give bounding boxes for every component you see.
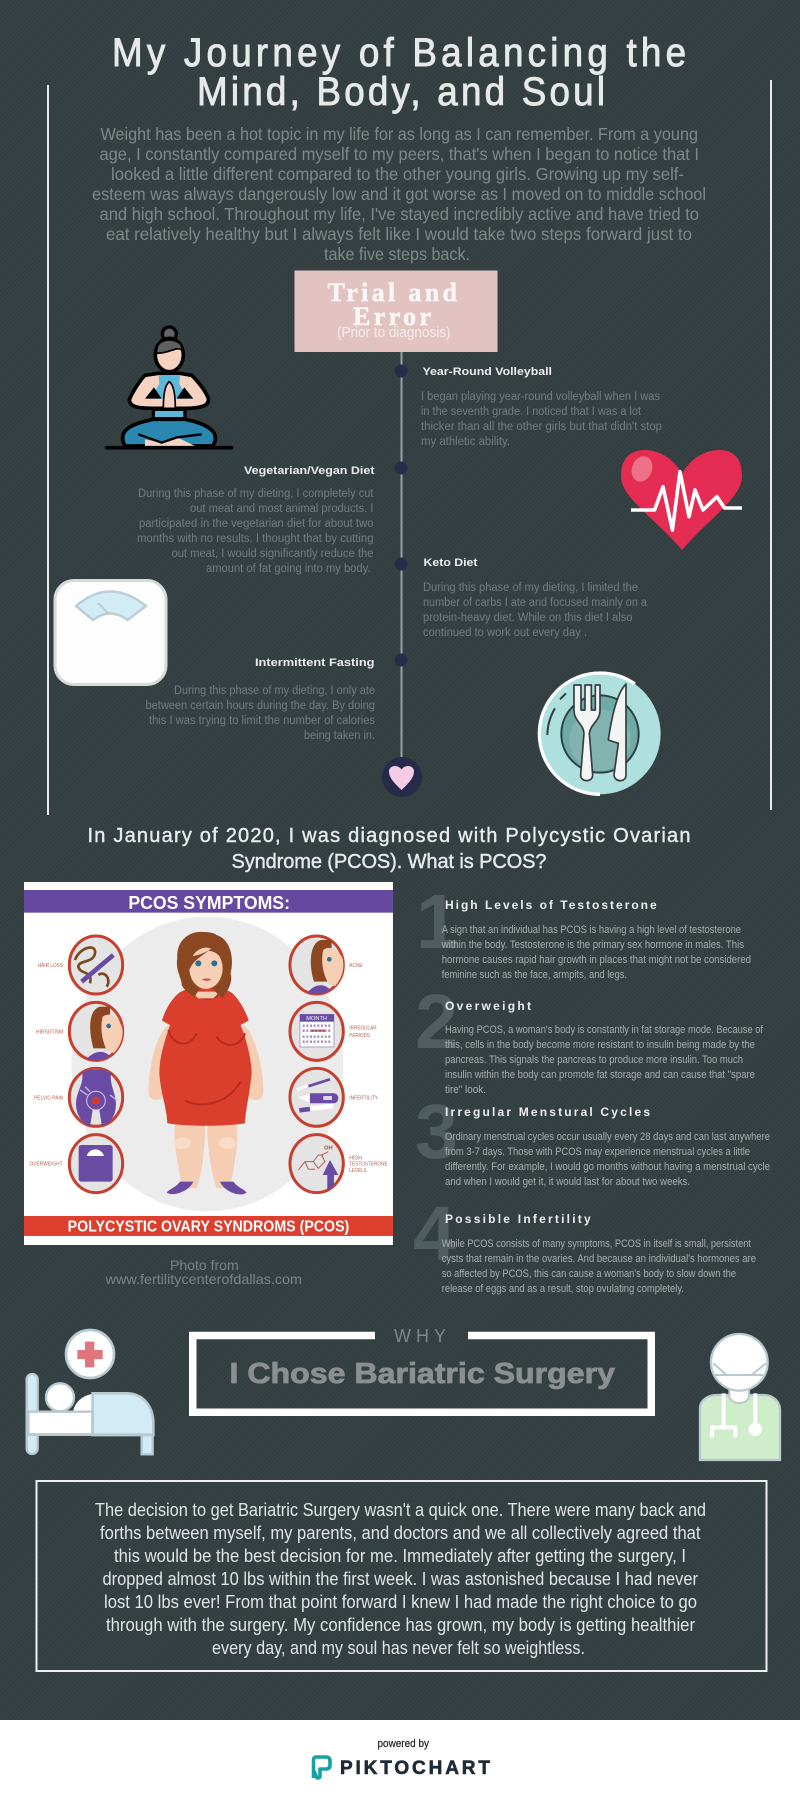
timeline item: vegetarian/vegan diet bbox=[137, 462, 408, 575]
panel: trial and error heading box: Error bbox=[353, 302, 431, 331]
banner: polycystic ovary syndroms: POLYCYSTIC OVARY SYNDROMS (PCOS) bbox=[68, 1219, 349, 1236]
woman figure bbox=[148, 932, 263, 1194]
timeline item: year-round volleyball: thicker than all the other girls but that didn't stop bbox=[421, 421, 662, 433]
timeline item: vegetarian/vegan diet: months with no results. I thought that by cutting bbox=[137, 533, 374, 545]
intro paragraph: looked a little different compared to the other young girls. Growing up my self- bbox=[111, 164, 684, 184]
panel: trial and error heading box: (Prior to diagnosis) bbox=[337, 324, 450, 341]
panel: surgery decision text box: through with the surgery. My confidence has grown, my body is getting healthier bbox=[106, 1614, 695, 1635]
symptom: hair loss bbox=[38, 936, 123, 994]
symptom 1: high levels of testosterone: within the body. Testosterone is the primary sex hormone in males. This bbox=[441, 939, 744, 951]
symptom 2: overweight: tire" look. bbox=[445, 1084, 486, 1096]
section heading bbox=[88, 825, 690, 873]
section heading: Syndrome (PCOS). What is PCOS? bbox=[232, 851, 546, 873]
symptom 4: possible infertility: While PCOS consists of many symptoms, PCOS in itself is small, persistent bbox=[442, 1238, 751, 1250]
panel: why I chose bariatric surgery frame: I Chose Bariatric Surgery bbox=[230, 1358, 615, 1390]
symptom 3: irregular menstural cycles bbox=[415, 1089, 770, 1188]
timeline item: intermittent fasting: During this phase of my dieting, I only ate bbox=[174, 685, 375, 697]
timeline item: year-round volleyball: in the seventh grade. I noticed that I was a lot bbox=[421, 406, 642, 418]
timeline line bbox=[400, 352, 402, 760]
big number 2: 2 bbox=[415, 979, 458, 1065]
photo credit: www.fertilitycenterofdallas.com bbox=[105, 1271, 302, 1287]
symptom: irregular periods bbox=[290, 1002, 377, 1060]
intro paragraph: age, I constantly compared myself to my peers, that's when I began to notice that I bbox=[100, 144, 699, 164]
symptom: irregular periods: IRREGULAR bbox=[349, 1025, 377, 1031]
panel: surgery decision text box: every day, and my soul has never felt so weightless. bbox=[212, 1637, 585, 1658]
icon: hospital bed bbox=[27, 1330, 153, 1454]
right frame line bbox=[770, 80, 772, 810]
timeline item: keto diet: During this phase of my dieting, I limited the bbox=[423, 582, 638, 594]
icon: weighing scale bbox=[55, 580, 166, 684]
timeline dot bbox=[394, 364, 408, 378]
panel: surgery decision text box: dropped almost 10 lbs within the first week. I was astonished because I had never bbox=[102, 1568, 698, 1589]
banner: PCOS symptoms: PCOS SYMPTOMS: bbox=[128, 892, 290, 913]
timeline item: vegetarian/vegan diet: amount of fat going into my body. bbox=[206, 563, 370, 575]
symptom: hirsutism: HIRSUTISM bbox=[36, 1029, 63, 1035]
big number 3: 3 bbox=[415, 1089, 458, 1175]
panel: surgery decision text box bbox=[36, 1481, 766, 1671]
intro paragraph: esteem was always dangerously low and it got worse as I moved on to middle school bbox=[92, 184, 706, 204]
icon: plate with fork and knife bbox=[539, 673, 661, 794]
panel: trial and error heading box bbox=[294, 270, 498, 352]
symptom: high testosterone levels: OH bbox=[324, 1145, 333, 1151]
symptom: irregular periods: PERIODS bbox=[349, 1033, 370, 1039]
symptom: overweight bbox=[29, 1135, 123, 1193]
timeline item: keto diet: protein-heavy diet. While on this diet I also bbox=[423, 612, 632, 624]
icon: heart end marker bbox=[382, 757, 422, 797]
symptom 3: irregular menstural cycles: and when I would get it, it would last for about two weeks. bbox=[445, 1176, 690, 1188]
intro paragraph bbox=[92, 124, 706, 264]
symptom: irregular periods: MONTH bbox=[306, 1016, 327, 1022]
panel: trial and error heading box: Trial and bbox=[328, 278, 458, 307]
timeline item: vegetarian/vegan diet: participated in the vegetarian diet for about two bbox=[139, 518, 374, 530]
icon: yoga woman bbox=[107, 327, 232, 448]
timeline item: keto diet: number of carbs I ate and focused mainly on a bbox=[423, 597, 648, 609]
footer: powered by Piktochart bbox=[0, 1720, 800, 1800]
symptom: acne bbox=[290, 936, 363, 997]
symptom 4: possible infertility: release of eggs and as a result, stop ovulating completely. bbox=[442, 1283, 684, 1295]
footer: powered by Piktochart: powered by bbox=[378, 1738, 429, 1750]
symptom: hair loss: HAIR LOSS bbox=[38, 963, 63, 969]
timeline item: keto diet: continued to work out every day . bbox=[423, 627, 587, 639]
symptom 2: overweight bbox=[415, 979, 764, 1096]
icon: Piktochart logo bbox=[314, 1757, 330, 1778]
timeline item: keto diet bbox=[394, 557, 648, 639]
timeline item: year-round volleyball: Year-Round Volleyball bbox=[422, 366, 552, 378]
symptom 2: overweight: Overweight bbox=[445, 999, 531, 1013]
symptom: overweight: OVERWEIGHT bbox=[29, 1162, 63, 1168]
timeline item: intermittent fasting: Intermittent Fasting bbox=[255, 657, 374, 669]
timeline item: year-round volleyball: I began playing year-round volleyball when I was bbox=[421, 391, 660, 403]
big number 1: 1 bbox=[416, 879, 459, 965]
left frame line bbox=[47, 85, 49, 815]
symptom: pelvic pain: PELVIC PAIN bbox=[34, 1095, 63, 1101]
intro paragraph: take five steps back. bbox=[324, 244, 470, 264]
icon: heart with pulse bbox=[621, 450, 742, 550]
symptom 4: possible infertility bbox=[413, 1191, 756, 1295]
symptom: pelvic pain bbox=[34, 1068, 123, 1127]
photo credit: Photo from bbox=[170, 1257, 239, 1273]
icon: surgeon bbox=[700, 1334, 780, 1460]
timeline item: vegetarian/vegan diet: out meat, I would significantly reduce the bbox=[172, 548, 374, 560]
symptom 3: irregular menstural cycles: Irregular Menstural Cycles bbox=[445, 1105, 650, 1119]
timeline dot bbox=[394, 558, 408, 570]
banner: PCOS symptoms bbox=[24, 890, 393, 913]
symptom 1: high levels of testosterone: feminine such as the face, armpits, and legs. bbox=[442, 969, 627, 981]
panel: surgery decision text box: forths between myself, my parents, and doctors and we all collectively agreed that bbox=[100, 1522, 700, 1543]
panel: surgery decision text box: this would be the best decision for me. Immediately after getting the surgery, I bbox=[114, 1545, 686, 1566]
timeline item: vegetarian/vegan diet: Vegetarian/Vegan Diet bbox=[244, 465, 375, 477]
symptom: high testosterone levels: LEVELS bbox=[349, 1168, 367, 1174]
photo credit bbox=[105, 1257, 302, 1287]
title: My Journey of Balancing the bbox=[112, 31, 686, 75]
footer: powered by Piktochart: PIKTOCHART bbox=[340, 1758, 490, 1779]
symptom: acne: ACNE bbox=[349, 963, 363, 969]
title: Mind, Body, and Soul bbox=[197, 70, 605, 114]
panel: why I chose bariatric surgery frame bbox=[193, 1326, 651, 1412]
symptom 3: irregular menstural cycles: from 3-7 days. Those with PCOS may experience menstrual cycles a little bbox=[445, 1146, 750, 1158]
panel: why I chose bariatric surgery frame: WHY bbox=[394, 1326, 446, 1346]
symptom 2: overweight: pancreas. This signals the pancreas to produce more insulin. Too much bbox=[445, 1054, 743, 1066]
big number 4: 4 bbox=[413, 1191, 456, 1277]
timeline dot bbox=[394, 462, 408, 474]
symptom 4: possible infertility: cysts that remain in the ovaries. And because an individual's hormones are bbox=[442, 1253, 756, 1265]
intro paragraph: and high school. Throughout my life, I've stayed incredibly active and have tried to bbox=[100, 204, 699, 224]
symptom 4: possible infertility: Possible Infertility bbox=[445, 1212, 591, 1226]
symptom 1: high levels of testosterone: hormone causes rapid hair growth in places that might not be considered bbox=[442, 954, 751, 966]
symptom 2: overweight: insulin within the body can promote fat storage and can cause that "spare bbox=[445, 1069, 755, 1081]
timeline item: intermittent fasting bbox=[146, 654, 408, 742]
timeline item: intermittent fasting: being taken in. bbox=[304, 730, 375, 742]
timeline item: keto diet: Keto Diet bbox=[424, 557, 478, 569]
panel: PCOS symptoms illustration bbox=[24, 882, 393, 1245]
intro paragraph: eat relatively healthy but I always felt like I would take two steps forward just to bbox=[106, 224, 692, 244]
timeline dot bbox=[394, 654, 408, 666]
timeline item: year-round volleyball bbox=[394, 364, 662, 448]
symptom 1: high levels of testosterone: A sign that an individual has PCOS is having a high level of testosterone bbox=[442, 924, 741, 936]
panel: surgery decision text box: lost 10 lbs ever! From that point forward I knew I had made the right choice to go bbox=[104, 1591, 697, 1612]
timeline item: year-round volleyball: my athletic ability. bbox=[421, 436, 510, 448]
symptom: hirsutism bbox=[36, 1002, 123, 1063]
timeline item: intermittent fasting: between certain hours during the day. By doing bbox=[146, 700, 375, 712]
title bbox=[112, 31, 686, 114]
symptom: high testosterone levels: HIGH bbox=[349, 1155, 362, 1161]
symptom: high testosterone levels: TESTOSTERONE bbox=[349, 1162, 388, 1168]
symptom: infertility: INFERTILITY bbox=[349, 1095, 378, 1101]
symptom: infertility bbox=[290, 1068, 378, 1126]
panel: surgery decision text box: The decision to get Bariatric Surgery wasn't a quick one. There were many back and bbox=[95, 1499, 706, 1520]
symptom 2: overweight: this, cells in the body become more resistant to insulin being made by the bbox=[445, 1039, 755, 1051]
intro paragraph: Weight has been a hot topic in my life for as long as I can remember. From a young bbox=[100, 124, 698, 144]
symptom: high testosterone levels bbox=[290, 1135, 388, 1193]
section heading: In January of 2020, I was diagnosed with Polycystic Ovarian bbox=[88, 825, 690, 847]
symptom 1: high levels of testosterone: High Levels of Testosterone bbox=[445, 898, 657, 912]
symptom 1: high levels of testosterone bbox=[416, 879, 751, 981]
timeline item: intermittent fasting: this I was trying to limit the number of calories bbox=[149, 715, 375, 727]
timeline item: vegetarian/vegan diet: out meat and most animal products. I bbox=[190, 503, 374, 515]
symptom 4: possible infertility: so affected by PCOS, this can cause a woman's body to slow down the bbox=[442, 1268, 736, 1280]
timeline item: vegetarian/vegan diet: During this phase of my dieting, I completely cut bbox=[138, 488, 374, 500]
